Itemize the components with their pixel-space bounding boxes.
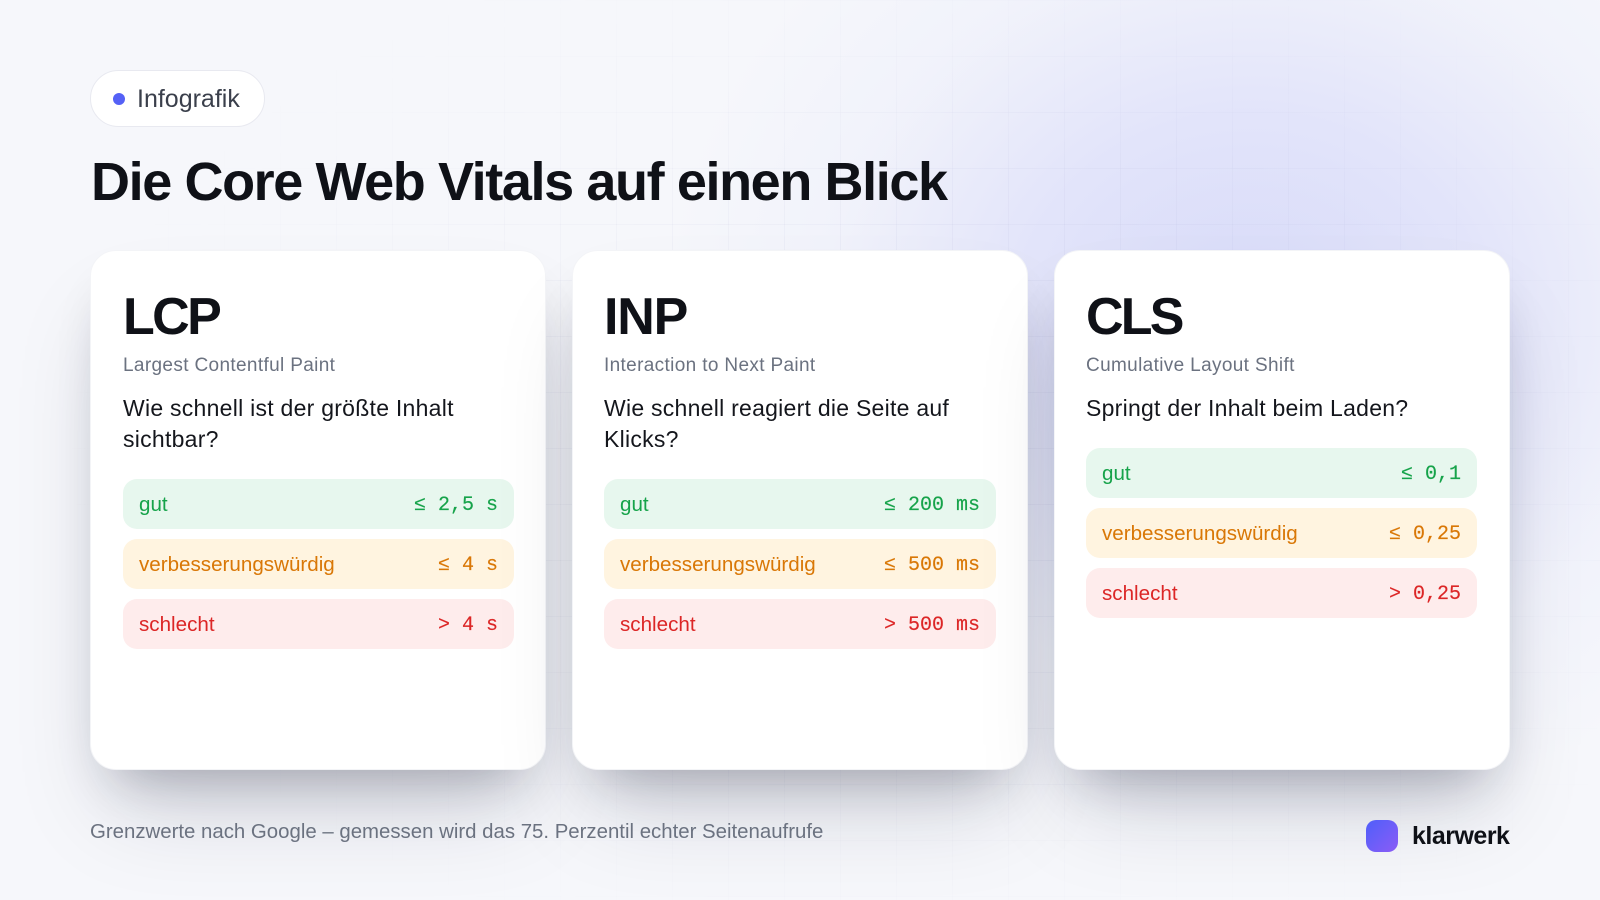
panel: LCP: [90, 250, 546, 770]
LCP threshold: verbesserungswürdig: ≤ 4 s: [438, 554, 498, 577]
CLS threshold: verbesserungswürdig: ≤ 0,25: [1389, 523, 1461, 546]
panel: INP: [572, 250, 1028, 770]
LCP threshold: verbesserungswürdig: verbesserungswürdig: [139, 553, 335, 576]
LCP threshold: gut: ≤ 2,5 s: [414, 494, 498, 517]
LCP threshold: gut: gut: [139, 493, 168, 516]
CLS threshold: gut: ≤ 0,1: [1401, 463, 1461, 486]
icon: klarwerk logo mark: [1366, 820, 1398, 852]
INP question: Wie schnell reagiert die Seite auf Klicks?: [604, 395, 949, 452]
badge label: Infografik: [137, 85, 240, 113]
CLS threshold: gut: gut: [1102, 462, 1131, 485]
icon: badge dot: [113, 93, 125, 105]
LCP question: Wie schnell ist der größte Inhalt sichtbar?: [123, 395, 454, 452]
INP threshold: verbesserungswürdig: [604, 539, 996, 589]
LCP threshold: schlecht: > 4 s: [438, 614, 498, 637]
LCP heading: LCP: [123, 288, 219, 346]
LCP threshold: gut: [123, 479, 514, 529]
badge: Infografik: [90, 70, 265, 127]
CLS threshold: schlecht: schlecht: [1102, 582, 1178, 605]
title: Die Core Web Vitals auf einen Blick: [91, 152, 947, 212]
CLS threshold: schlecht: [1086, 568, 1477, 618]
INP threshold: verbesserungswürdig: ≤ 500 ms: [884, 554, 980, 577]
LCP full name: Largest Contentful Paint: [123, 355, 335, 376]
INP threshold: verbesserungswürdig: verbesserungswürdig: [620, 553, 816, 576]
panel: CLS: [1054, 250, 1510, 770]
INP heading: INP: [604, 288, 687, 346]
CLS question: Springt der Inhalt beim Laden?: [1086, 395, 1408, 421]
INP threshold: gut: gut: [620, 493, 649, 516]
INP threshold: schlecht: [604, 599, 996, 649]
INP threshold: gut: ≤ 200 ms: [884, 494, 980, 517]
INP threshold: schlecht: schlecht: [620, 613, 696, 636]
INP threshold: gut: [604, 479, 996, 529]
CLS threshold: gut: [1086, 448, 1477, 498]
INP full name: Interaction to Next Paint: [604, 355, 816, 376]
LCP threshold: schlecht: schlecht: [139, 613, 215, 636]
CLS heading: CLS: [1086, 288, 1182, 346]
CLS threshold: verbesserungswürdig: [1086, 508, 1477, 558]
brand name: klarwerk: [1412, 822, 1509, 850]
CLS threshold: schlecht: > 0,25: [1389, 583, 1461, 606]
INP threshold: schlecht: > 500 ms: [884, 614, 980, 637]
LCP threshold: schlecht: [123, 599, 514, 649]
CLS full name: Cumulative Layout Shift: [1086, 355, 1295, 376]
LCP threshold: verbesserungswürdig: [123, 539, 514, 589]
CLS threshold: verbesserungswürdig: verbesserungswürdig: [1102, 522, 1298, 545]
footnote: Grenzwerte nach Google – gemessen wird das 75. Perzentil echter Seitenaufrufe: [90, 821, 823, 843]
